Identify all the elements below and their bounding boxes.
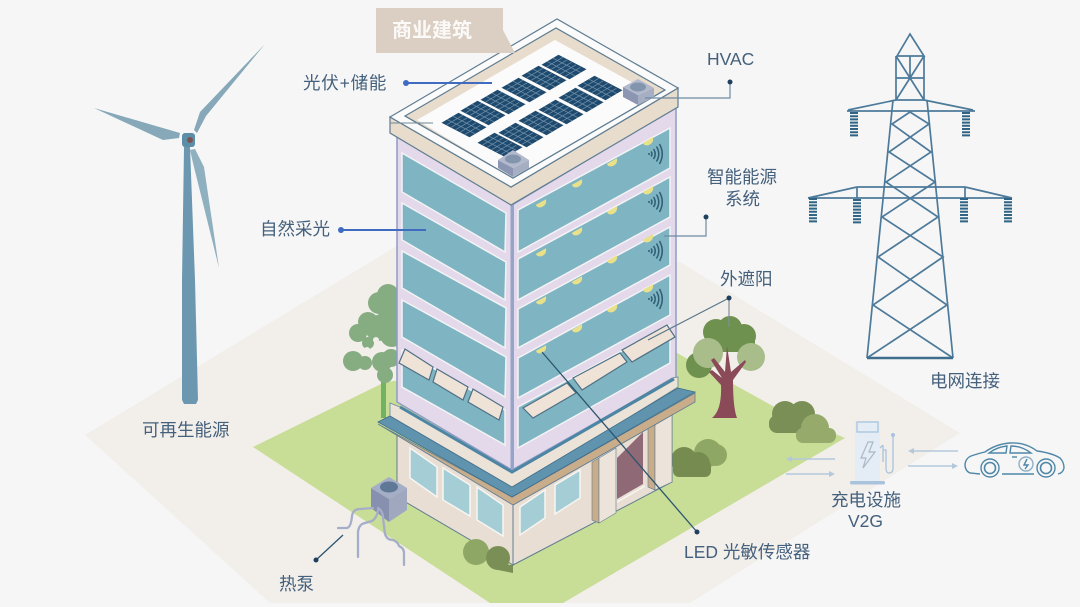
label: renewable energy: 可再生能源: [142, 420, 230, 440]
ground plane: [85, 247, 960, 603]
door sill: [617, 486, 645, 502]
label: grid connection: 电网连接: [930, 371, 1000, 391]
label: smart energy system: 智能能源: [707, 167, 777, 187]
electric car: [965, 443, 1064, 477]
LED lights: [536, 137, 653, 353]
label: HVAC: [645, 49, 754, 98]
label: smart energy system: 系统: [725, 189, 760, 209]
door: [617, 432, 643, 499]
label: charging facility V2G: 充电设施: [831, 490, 901, 510]
label: PV and storage: 光伏+储能: [303, 73, 387, 93]
podium ledge: [378, 377, 695, 505]
title tag: [376, 8, 515, 53]
right tree: [686, 316, 765, 418]
lawn: [253, 353, 845, 603]
charging station: [850, 421, 895, 484]
shrubs behind the street: [671, 401, 836, 477]
label: HVAC: HVAC: [707, 49, 754, 69]
label: daylighting: 自然采光: [260, 219, 330, 239]
V2G flow arrows: [786, 448, 958, 477]
label: PV and storage: [303, 73, 492, 123]
label: daylighting: [260, 219, 426, 239]
tower facades: [397, 107, 676, 470]
label: external shading: [648, 269, 772, 340]
columns: [592, 415, 672, 523]
left tree: [343, 284, 406, 418]
wind turbine: [94, 44, 265, 404]
corner post: [510, 205, 514, 470]
external shades: [399, 325, 675, 420]
rooftop HVAC unit right: [623, 79, 654, 105]
label: smart energy system: [664, 167, 777, 236]
sensors: [648, 144, 662, 309]
ground floor: [397, 415, 672, 565]
label: external shading: 外遮阳: [720, 269, 772, 289]
title tag: 商业建筑: [392, 18, 472, 42]
label: charging facility V2G: [831, 490, 901, 531]
label: heat pump: [279, 535, 343, 594]
power pylon: [808, 34, 1012, 358]
label: LED and light sensor: [542, 352, 810, 562]
label: charging facility V2G: V2G: [848, 511, 883, 531]
label: LED and light sensor: LED 光敏传感器: [684, 542, 810, 562]
rooftop HVAC unit front: [498, 150, 529, 177]
right windows: [518, 128, 670, 448]
left windows: [402, 153, 506, 445]
roof: [390, 19, 678, 205]
shrubs by the corner: [463, 539, 513, 573]
solar panels: [442, 55, 622, 157]
heat pump: [338, 477, 407, 565]
label: heat pump: 热泵: [279, 574, 314, 594]
